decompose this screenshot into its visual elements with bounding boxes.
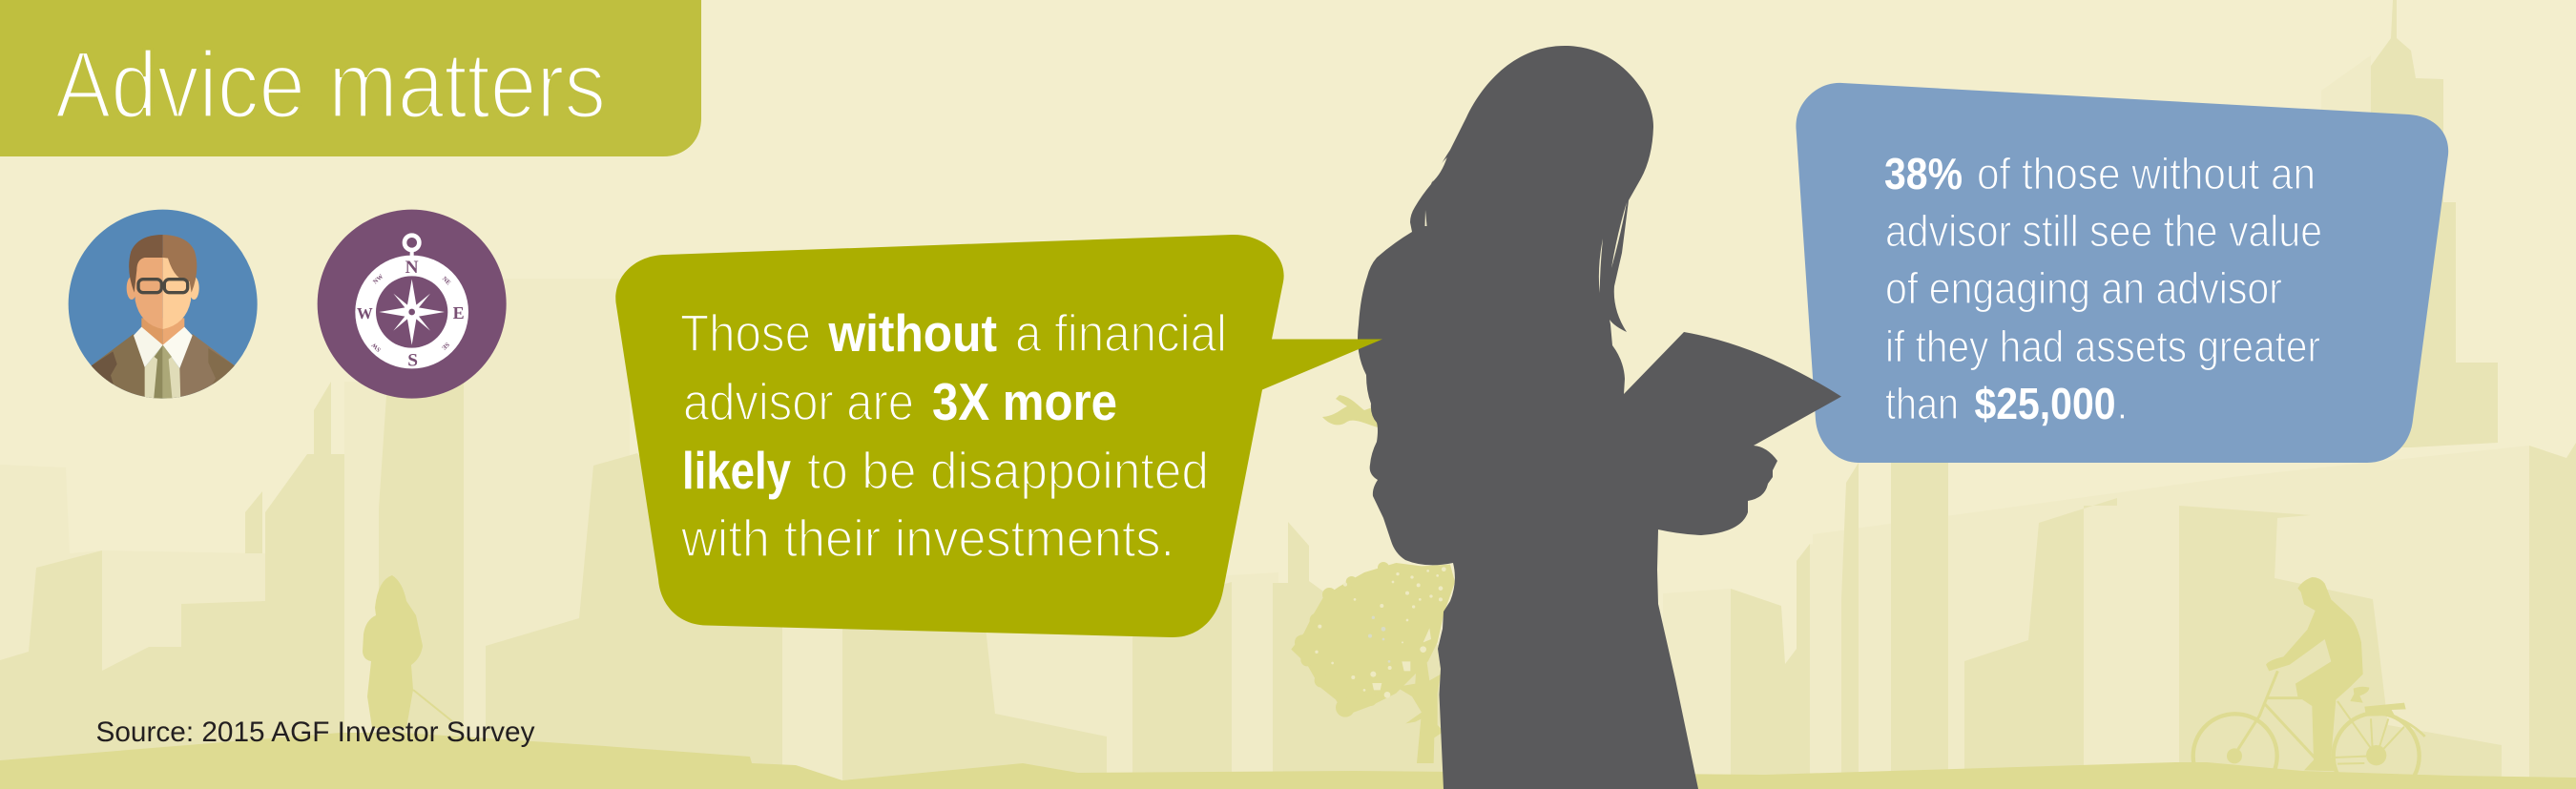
ground	[0, 733, 2576, 789]
icon: compass: N	[405, 258, 419, 278]
title: Advice matters	[55, 31, 606, 137]
icon: compass: SE	[440, 341, 450, 351]
silhouette: woman reading	[1358, 46, 1841, 789]
panel: green speech bubble: 3X more	[932, 372, 1117, 431]
panel: blue speech bubble: if they had assets greater	[1885, 322, 2320, 371]
panel: green speech bubble	[615, 235, 1382, 637]
icon: compass: W	[357, 304, 373, 322]
panel: green speech bubble: Those	[680, 303, 811, 363]
cyclist	[2193, 577, 2425, 789]
panel: blue speech bubble: of engaging an advisor	[1885, 263, 2282, 313]
icon: compass: E	[453, 303, 465, 322]
icon: compass: NE	[441, 276, 452, 287]
panel: blue speech bubble: .	[2116, 379, 2129, 428]
source note: Source: 2015 AGF Investor Survey	[95, 716, 534, 748]
leaf-shaped bird	[1322, 395, 1378, 427]
panel: blue speech bubble: 38%	[1884, 149, 1963, 198]
panel: green speech bubble: to be disappointed	[807, 441, 1209, 500]
panel: blue speech bubble: $25,000	[1975, 379, 2116, 428]
panel: blue speech bubble: than	[1885, 379, 1959, 428]
panel: green speech bubble: advisor are	[683, 372, 914, 431]
small woman walking a dog	[363, 575, 452, 728]
panel: green speech bubble: likely	[682, 441, 791, 500]
icon: compass: S	[407, 350, 418, 370]
icon: compass: SW	[370, 341, 383, 353]
icon: advisor portrait	[69, 210, 258, 413]
panel: green speech bubble: with their investments.	[680, 509, 1174, 568]
panel: blue speech bubble	[1796, 83, 2448, 463]
icon: compass	[318, 210, 507, 399]
panel: green speech bubble: without	[828, 303, 997, 363]
panel: green speech bubble: a financial	[1015, 303, 1227, 363]
panel: blue speech bubble: advisor still see the value	[1885, 206, 2322, 256]
tree	[1291, 562, 1455, 763]
panel: blue speech bubble: of those without an	[1977, 149, 2316, 198]
icon: compass: NW	[372, 273, 385, 285]
panel: title banner	[0, 0, 701, 156]
